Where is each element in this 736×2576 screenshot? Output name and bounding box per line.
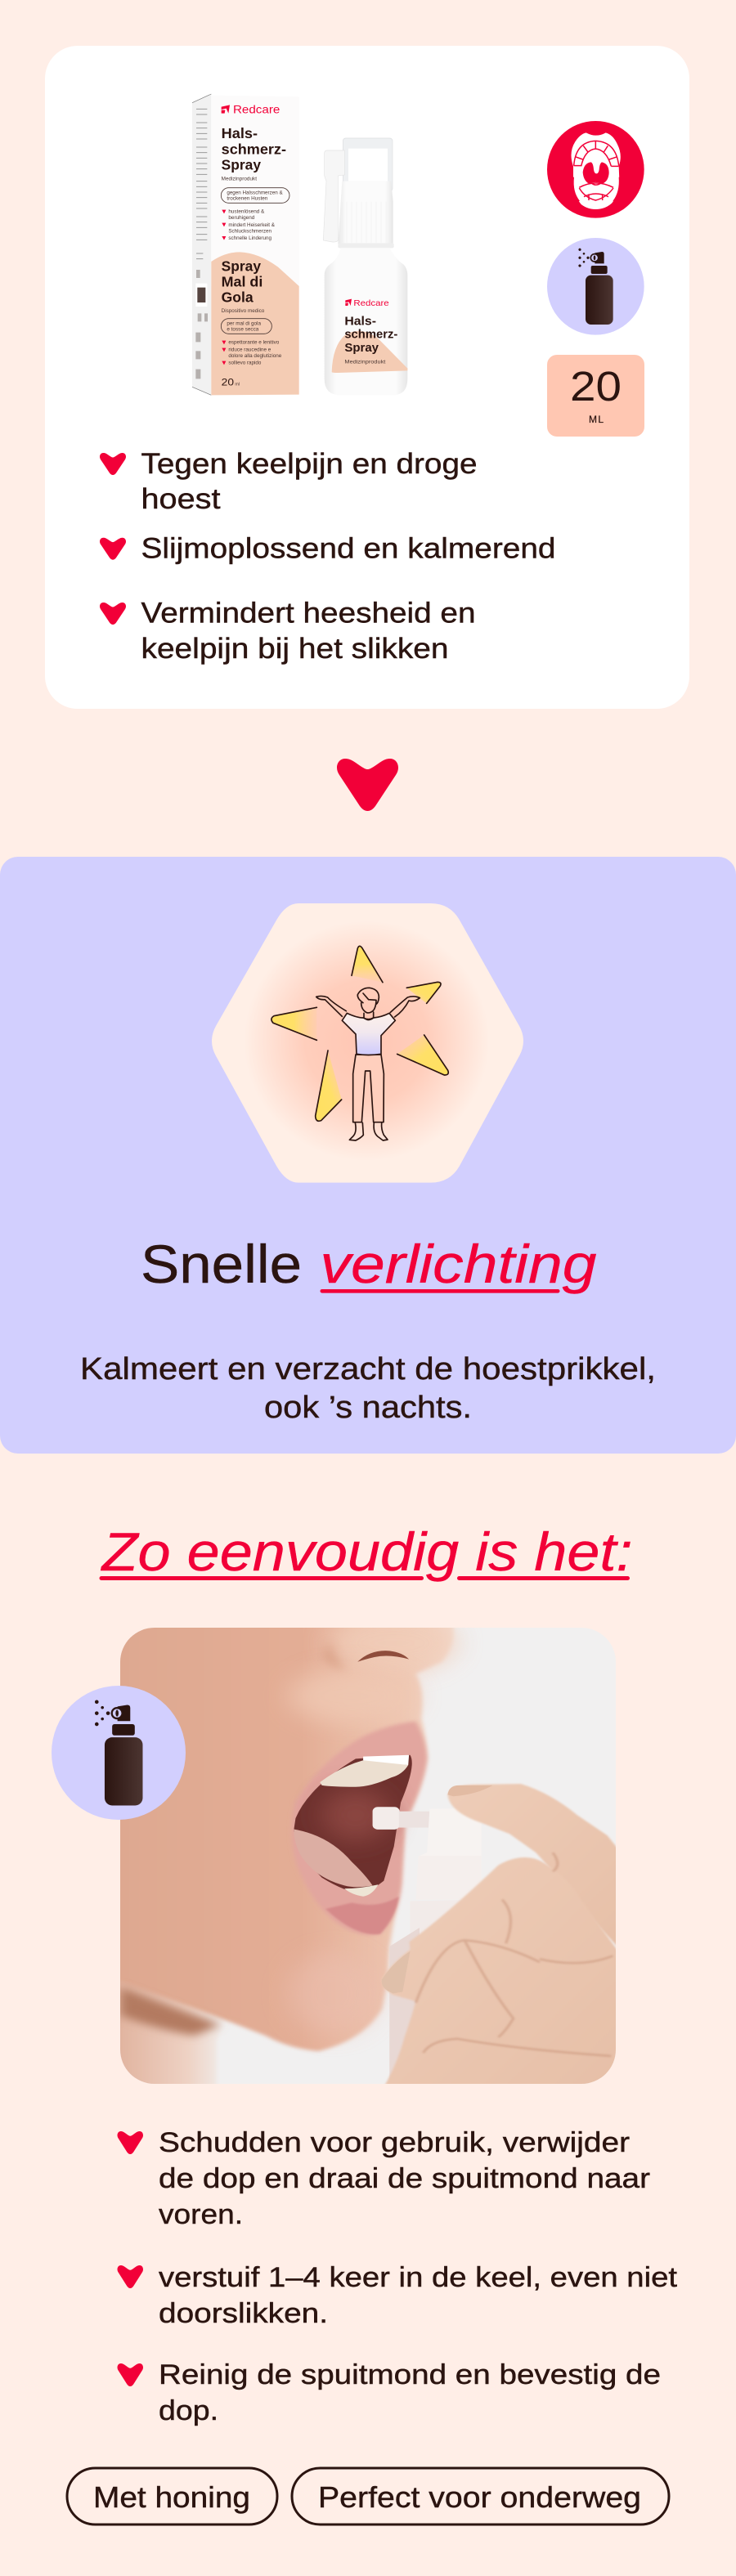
product box: Redcare [233, 103, 280, 116]
product bottle: Redcare [353, 299, 389, 308]
text: description: ook ’s nachts. [264, 1391, 472, 1425]
pill: perfect voor onderweg: Perfect voor onderweg [318, 2480, 641, 2514]
icon: spray bottle on photo [52, 1686, 186, 1820]
bullet: heesheid: keelpijn bij het slikken [141, 633, 448, 665]
product box: e tosse secca [227, 328, 259, 333]
product photo: box and bottle [192, 94, 407, 395]
pill: perfect voor onderweg [292, 2468, 669, 2524]
product box: Dispositivo medico [222, 309, 265, 314]
bullet list: benefits [100, 448, 556, 665]
product box: sollievo rapido [228, 361, 262, 366]
product box: hustenlösend & [228, 210, 264, 215]
step: schudden: voren. [159, 2199, 243, 2230]
step: verstuif [118, 2262, 678, 2329]
product bottle [323, 138, 407, 395]
step: reinig [118, 2359, 661, 2426]
product bottle: Spray [344, 342, 379, 355]
badge: 20 ml [547, 355, 644, 437]
text: description: Kalmeert en verzacht de hoestprikkel, [80, 1352, 656, 1387]
product box: schnelle Linderung [228, 236, 272, 241]
bullet: slijmoplossend: Slijmoplossend en kalmerend [141, 533, 556, 565]
step: reinig: dop. [159, 2395, 218, 2426]
badge: 20 ml: ML [589, 414, 604, 425]
pill: met honing [67, 2468, 277, 2524]
product box: Medizinprodukt [222, 177, 257, 181]
illustration: hexagon with person and star [212, 903, 523, 1183]
step: schudden: Schudden voor gebruik, verwijder [159, 2127, 630, 2158]
text: description [80, 1352, 656, 1425]
product box: gegen Halsschmerzen & [227, 190, 283, 195]
product box [192, 94, 299, 395]
product box: dolore alla deglutizione [228, 354, 282, 359]
product box: ml [235, 382, 240, 387]
product box: 20 [222, 376, 234, 388]
product box: Gola [222, 289, 254, 305]
icon: open mouth [547, 121, 644, 218]
bullet: keelpijn: hoest [141, 483, 221, 515]
product box: per mal di gola [227, 321, 262, 326]
bullet: heesheid: Vermindert heesheid en [141, 598, 476, 629]
product box: Mal di [222, 273, 263, 289]
bullet: keelpijn: Tegen keelpijn en droge [141, 448, 478, 480]
bullet: keelpijn [100, 448, 478, 515]
heading: snelle verlichting [141, 1234, 597, 1294]
bullet list: instructions [118, 2127, 678, 2426]
product box: Spray [222, 156, 261, 172]
step: verstuif: verstuif 1–4 keer in de keel, even niet [159, 2262, 678, 2293]
icon: large heart arrow [337, 759, 398, 811]
step: reinig: Reinig de spuitmond en bevestig de [159, 2359, 661, 2390]
product bottle: schmerz- [344, 328, 397, 341]
step: schudden: de dop en draai de spuitmond naar [159, 2163, 650, 2194]
star segments [272, 946, 448, 1121]
heading: snelle verlichting: Snelle [141, 1234, 302, 1294]
heading: zo eenvoudig is het: Zo eenvoudig is het: [100, 1521, 632, 1582]
panel: quick relief [0, 857, 736, 1454]
panel: product card [45, 46, 689, 709]
product box: mindert Heiserkeit & [228, 223, 275, 228]
person [316, 988, 420, 1140]
badge: 20 ml: 20 [570, 363, 622, 410]
product box: espettorante e lenitivo [228, 341, 280, 346]
product box: trockenen Husten [227, 197, 267, 202]
product box: riduce raucedine e [228, 348, 272, 353]
step: verstuif: doorslikken. [159, 2298, 328, 2329]
icon: spray bottle in lavender circle [547, 238, 644, 335]
product bottle: Medizinprodukt [344, 360, 386, 365]
product box: Hals- [222, 125, 258, 141]
product box: Schluckschmerzen [228, 229, 272, 234]
heading: snelle verlichting: verlichting [321, 1234, 597, 1294]
pill: met honing: Met honing [93, 2480, 250, 2514]
product box: Spray [222, 258, 261, 275]
photo: woman using throat spray [120, 1628, 616, 2084]
product box: schmerz- [222, 141, 286, 157]
product bottle: Hals- [344, 315, 376, 328]
bullet: heesheid [100, 598, 476, 665]
step: schudden [118, 2127, 650, 2230]
product box: beruhigend [228, 216, 254, 221]
